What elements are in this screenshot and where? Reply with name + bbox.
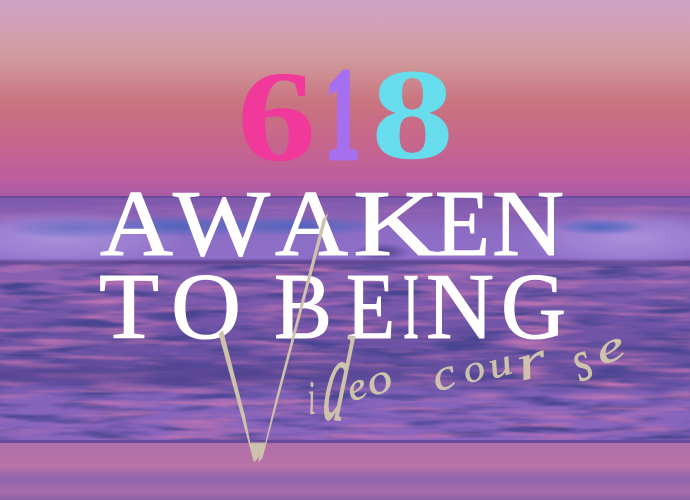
script word: V of Video bbox=[218, 214, 328, 462]
background: sand bbox=[0, 443, 690, 500]
digit 6: 6 bbox=[237, 45, 316, 189]
background: ocean bbox=[0, 197, 690, 447]
script subtitle: ideo course: s bbox=[561, 329, 601, 394]
heading: To Being: T bbox=[99, 255, 159, 359]
script subtitle: ideo course: u bbox=[483, 341, 517, 388]
script subtitle: ideo course: i bbox=[306, 372, 317, 425]
script subtitle: ideo course: r bbox=[509, 330, 554, 391]
digit 8: 8 bbox=[371, 43, 454, 187]
digit 1: 1 bbox=[325, 43, 360, 187]
heading: To Being: E bbox=[346, 255, 395, 359]
heading: Awaken bbox=[100, 172, 564, 276]
heading: To Being: B bbox=[274, 255, 332, 359]
heading: Awaken: A bbox=[275, 172, 348, 276]
script subtitle: ideo course bbox=[306, 310, 632, 449]
heading: To Being: I bbox=[403, 255, 419, 359]
script subtitle: ideo course: e bbox=[339, 364, 373, 410]
heading: Awaken: W bbox=[173, 172, 270, 276]
heading: To Being: O bbox=[171, 255, 241, 359]
horizon line bbox=[0, 196, 690, 198]
heading: To Being: N bbox=[426, 255, 494, 359]
script subtitle: ideo course: c bbox=[425, 348, 462, 402]
heading: Awaken: E bbox=[435, 172, 490, 276]
script subtitle: ideo course: o bbox=[358, 353, 399, 405]
script subtitle: ideo course: o bbox=[457, 345, 490, 392]
heading: Awaken: N bbox=[492, 172, 564, 276]
water ripples bbox=[0, 200, 690, 440]
number 618 bbox=[237, 43, 454, 189]
heading: Awaken: K bbox=[353, 172, 439, 276]
heading: Awaken: A bbox=[100, 172, 173, 276]
script subtitle: ideo course: e bbox=[587, 321, 632, 374]
heading: To Being bbox=[99, 255, 566, 359]
rolling wave shadow bbox=[0, 364, 410, 386]
shoreline bbox=[0, 440, 690, 443]
background: sunset sky bbox=[0, 0, 690, 198]
heading: To Being: G bbox=[501, 255, 566, 359]
script subtitle: ideo course: d bbox=[317, 310, 359, 449]
breaking wave foam bbox=[0, 210, 690, 266]
